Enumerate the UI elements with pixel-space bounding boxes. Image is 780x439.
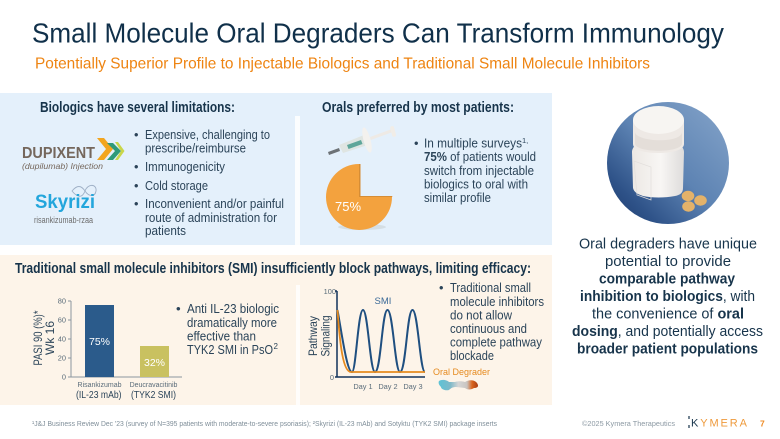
bar chart: PASI 90: 40 — [58, 334, 66, 344]
heading: orals preferred: Orals preferred by most patients: — [322, 100, 514, 116]
bullet list: biologics limitations: • — [134, 196, 138, 211]
page number: 7 — [760, 418, 765, 428]
bar chart: PASI 90: 80 — [58, 296, 66, 306]
callout: oral degraders: broader patient populations — [577, 340, 758, 358]
copyright: ©2025 Kymera Therapeutics — [582, 419, 675, 428]
bullet: traditional SMI: • — [439, 280, 443, 295]
bar chart: PASI 90 — [31, 296, 182, 401]
panel: biologics limitations and oral preference — [0, 93, 552, 245]
bar chart: PASI 90: 0 — [62, 372, 66, 382]
bar chart: PASI 90: 20 — [58, 354, 66, 362]
logo: Skyrizi — [34, 185, 96, 225]
subtitle: Potentially Superior Profile to Injectable Biologics and Traditional Small Molecule Inhibitors — [35, 56, 650, 72]
logo: Skyrizi: Skyrizi — [35, 192, 95, 213]
axis title: Pathway — [306, 316, 320, 356]
axis title: Signaling — [318, 316, 332, 356]
pie chart: 75 percent — [326, 164, 392, 230]
bullet: traditional SMI: continuous and — [450, 321, 527, 336]
logo: Dupixent: (dupilumab) Injection — [22, 161, 103, 171]
bullet list: biologics limitations: • — [134, 159, 138, 174]
bullet list: biologics limitations: patients — [145, 223, 186, 238]
logo: Kymera: KYMERA — [691, 418, 748, 430]
bullet: anti IL-23: dramatically more — [187, 315, 277, 330]
curve: oral degrader — [338, 310, 425, 372]
footnote: ¹J&J Business Review Dec '23 (survey of N=395 patients with moderate-to-severe psoriasis); ²Skyrizi (IL-23 mAb) and Sotyktu (TYK2 SMI) package inserts — [32, 419, 497, 428]
bullet: anti IL-23 — [176, 301, 279, 357]
bullet: survey: In multiple surveys — [424, 136, 522, 150]
line chart: pathway signaling: Oral Degrader — [433, 367, 490, 378]
bullet: traditional SMI: complete pathway — [450, 334, 543, 350]
bullet list: biologics limitations: Expensive, challenging to — [145, 127, 270, 142]
callout: oral degraders — [572, 236, 763, 358]
bullet: anti IL-23: • — [176, 301, 181, 316]
bullet: survey: 1, — [522, 136, 528, 145]
callout: oral degraders: the convenience of oral — [592, 306, 744, 322]
bullet: anti IL-23: TYK2 SMI in PsO — [187, 342, 273, 357]
bullet: anti IL-23: 2 — [274, 342, 278, 351]
logo: Skyrizi: risankizumab-rzaa — [34, 215, 93, 225]
callout: oral degraders: Oral degraders have unique — [579, 236, 757, 252]
bullet list: biologics limitations: Inconvenient and/or painful — [145, 196, 284, 211]
bar chart: PASI 90: (IL-23 mAb) — [76, 390, 122, 401]
axis title — [31, 310, 57, 366]
line chart: pathway signaling: Day 1 — [353, 382, 373, 391]
title: Small Molecule Oral Degraders Can Transform Immunology — [32, 18, 724, 48]
bullet: traditional SMI — [439, 280, 544, 363]
icon: degrader molecule — [439, 380, 478, 390]
line chart: pathway signaling: 100 — [324, 287, 336, 296]
bullet list: biologics limitations: • — [134, 127, 138, 142]
bar: Risankizumab — [85, 305, 114, 377]
bar chart: PASI 90: (TYK2 SMI) — [131, 390, 176, 401]
line chart: pathway signaling: SMI — [375, 296, 391, 307]
axis title — [306, 316, 332, 356]
bullet list: biologics limitations — [134, 127, 284, 238]
bullet: survey — [414, 136, 536, 205]
bullet: traditional SMI: blockade — [450, 348, 494, 363]
line chart: pathway signaling — [306, 287, 490, 391]
bullet list: biologics limitations: • — [134, 178, 138, 193]
bullet list: biologics limitations: Immunogenicity — [145, 159, 226, 174]
heading: biologics limitations: Biologics have several limitations: — [40, 100, 235, 116]
axis title: Wk 16 — [43, 321, 57, 355]
callout: oral degraders: inhibition to biologics, with — [580, 288, 755, 305]
bar chart: PASI 90: Risankizumab — [78, 382, 122, 389]
bottle body — [632, 144, 684, 198]
curve: SMI — [338, 310, 425, 372]
bullet list: biologics limitations: route of administration for — [145, 210, 278, 225]
bar: Deucravacitinib — [140, 346, 169, 377]
panel: small molecule inhibitors — [0, 255, 552, 405]
bullet: anti IL-23: Anti IL-23 biologic — [187, 301, 279, 316]
bullet: traditional SMI: molecule inhibitors — [450, 294, 544, 309]
bar chart: PASI 90: Deucravacitinib — [130, 382, 178, 389]
bullet: anti IL-23: effective than — [187, 328, 256, 344]
bar: Deucravacitinib: 32% — [144, 357, 165, 369]
callout: oral degraders: potential to provide — [605, 253, 731, 270]
line chart: pathway signaling: Day 3 — [403, 382, 423, 391]
bottle cap — [633, 106, 684, 153]
bullet: traditional SMI: do not allow — [450, 308, 513, 322]
line chart: pathway signaling: 0 — [330, 373, 334, 382]
icon: syringe — [328, 126, 396, 155]
bullet list: biologics limitations: prescribe/reimburse — [145, 140, 246, 156]
callout: oral degraders: comparable pathway — [599, 270, 736, 288]
bar chart: PASI 90: 60 — [58, 316, 66, 324]
pie chart: 75 percent: 75% — [335, 199, 361, 214]
logo: Dupixent: DUPIXENT — [22, 145, 95, 162]
pills — [682, 191, 707, 212]
axis title: PASI 90 (%)* — [31, 310, 45, 366]
bullet: survey: similar profile — [424, 190, 491, 205]
bullet list: biologics limitations: Cold storage — [145, 178, 208, 193]
bullet: survey: • — [414, 136, 418, 150]
bullet: survey: 75% of patients would — [424, 149, 536, 164]
callout: oral degraders: dosing, and potentially access — [572, 323, 763, 340]
heading: SMI limitations: Traditional small molecule inhibitors (SMI) insufficiently block pathways, limiting efficacy: — [15, 261, 531, 277]
image: pill bottle on blue circle — [607, 102, 729, 224]
bullet: survey: biologics to oral with — [424, 176, 528, 192]
bullet: survey: switch from injectable — [424, 163, 534, 178]
bar: Risankizumab: 75% — [89, 336, 110, 348]
line chart: pathway signaling: Day 2 — [378, 382, 398, 391]
bullet: traditional SMI: Traditional small — [450, 280, 531, 295]
logo: Dupixent — [22, 138, 124, 171]
